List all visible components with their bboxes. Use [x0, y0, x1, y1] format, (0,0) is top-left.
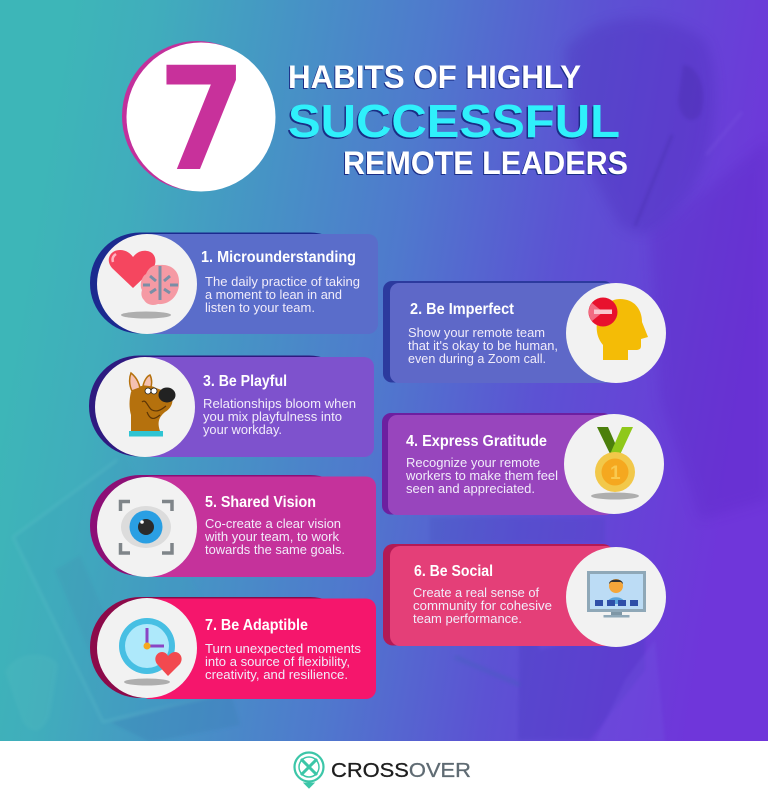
icon: eye in viewfinder	[120, 502, 172, 553]
title badge: number 7	[122, 36, 276, 203]
heading: 5. Shared Vision	[205, 494, 316, 511]
panel: 5. Shared Vision	[90, 475, 376, 577]
description: workers to make them feel	[405, 468, 558, 483]
logo: Crossover	[294, 752, 471, 788]
description	[205, 641, 362, 682]
panel: 4. Express Gratitude	[382, 413, 664, 515]
icon: location pin with cross	[294, 752, 324, 788]
heading: 7. Be Adaptible	[205, 617, 308, 634]
description	[413, 585, 552, 626]
icon: cartoon dog	[129, 373, 176, 436]
description: community for cohesive	[413, 598, 552, 613]
description	[405, 455, 558, 496]
description: with your team, to work	[204, 529, 340, 544]
panel: 2. Be Imperfect	[383, 281, 666, 383]
description	[205, 274, 360, 315]
description	[204, 516, 345, 557]
footer band	[0, 741, 768, 798]
description: Recognize your remote	[406, 455, 540, 470]
description: towards the same goals.	[205, 542, 345, 557]
description: The daily practice of taking	[205, 274, 360, 289]
title	[286, 59, 628, 182]
wordmark: CROSS OVER	[331, 760, 471, 782]
title: HABITS OF HIGHLY	[288, 59, 581, 95]
icon: video call monitor	[587, 571, 646, 618]
description: seen and appreciated.	[406, 481, 535, 496]
title: REMOTE LEADERS	[342, 146, 627, 182]
heading: 1. Microunderstanding	[201, 249, 356, 266]
description: team performance.	[413, 611, 522, 626]
description	[203, 396, 356, 437]
description: creativity, and resilience.	[205, 667, 348, 682]
description: Create a real sense of	[413, 585, 539, 600]
silhouette: cup	[5, 655, 58, 731]
title badge: number 7: 7	[158, 36, 246, 203]
description: listen to your team.	[205, 300, 315, 315]
heading: 4. Express Gratitude	[406, 433, 547, 450]
description	[408, 325, 558, 366]
heading: 3. Be Playful	[203, 373, 287, 390]
icon: gold medal: 1	[610, 463, 621, 484]
panel: 1. Microunderstanding	[90, 232, 378, 334]
description: your workday.	[203, 422, 282, 437]
title: HABITS OF HIGHLY	[287, 60, 580, 96]
description: Show your remote team	[408, 325, 545, 340]
silhouette: remote worker with headset	[430, 18, 768, 742]
description: even during a Zoom call.	[408, 351, 546, 366]
description: Relationships bloom when	[203, 396, 356, 411]
panel: 3. Be Playful	[89, 356, 374, 457]
heading: 2. Be Imperfect	[410, 301, 514, 318]
panel: 6. Be Social	[383, 544, 666, 647]
description: that it's okay to be human,	[408, 338, 558, 353]
description: into a source of flexibility,	[205, 654, 350, 669]
icon: head with minus sign	[588, 298, 648, 360]
title: SUCCESSFUL	[286, 96, 618, 148]
heading: 6. Be Social	[414, 563, 493, 580]
title: REMOTE LEADERS	[343, 145, 628, 181]
panel: 7. Be Adaptible	[90, 597, 376, 699]
icon: gold medal	[591, 427, 639, 500]
title: SUCCESSFUL	[288, 95, 620, 147]
icon: heart and brain	[109, 250, 179, 318]
silhouette: laptop on the desk	[13, 455, 250, 742]
description: a moment to lean in and	[205, 287, 342, 302]
description: Turn unexpected moments	[205, 641, 362, 656]
icon: clock with heart	[119, 618, 182, 686]
description: you mix playfulness into	[203, 409, 342, 424]
description: Co-create a clear vision	[205, 516, 341, 531]
